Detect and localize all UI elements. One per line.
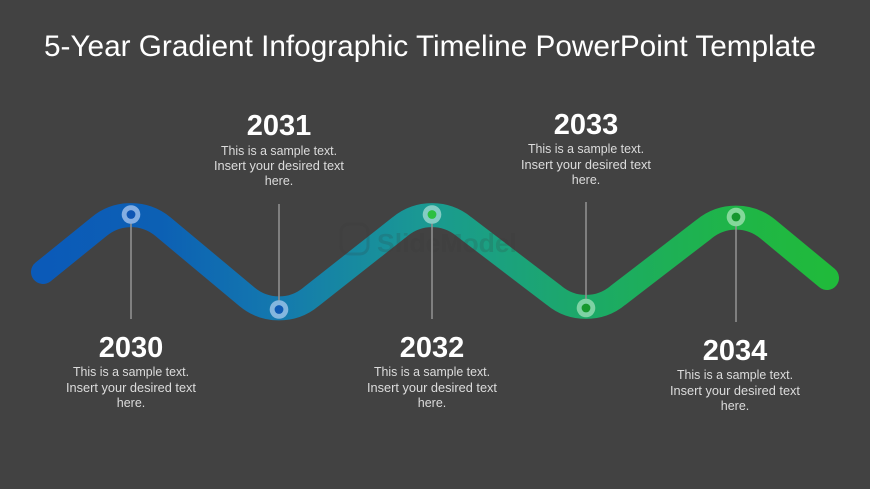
title: 5-Year Gradient Infographic Timeline PowerPoint Template bbox=[44, 30, 816, 63]
label 2034: This is a sample text. bbox=[677, 368, 793, 382]
label 2034: 2034 bbox=[703, 335, 767, 367]
label 2031 bbox=[214, 110, 345, 188]
node 2034 bbox=[727, 208, 745, 226]
node 2030 bbox=[122, 205, 140, 224]
gradient wave ribbon bbox=[43, 215, 827, 308]
label 2030 bbox=[66, 332, 197, 410]
label 2030: This is a sample text. bbox=[73, 365, 189, 379]
label 2033: Insert your desired text bbox=[521, 158, 652, 172]
label 2033: here. bbox=[572, 173, 600, 187]
watermark bbox=[341, 224, 517, 258]
label 2033 bbox=[521, 109, 652, 187]
label 2030: here. bbox=[117, 396, 145, 410]
node 2032 bbox=[423, 205, 441, 224]
label 2031: here. bbox=[265, 174, 293, 188]
label 2031: 2031 bbox=[247, 110, 311, 142]
label 2032: here. bbox=[418, 396, 446, 410]
label 2031: Insert your desired text bbox=[214, 159, 345, 173]
label 2034 bbox=[670, 335, 801, 413]
label 2031: This is a sample text. bbox=[221, 144, 337, 158]
label 2034: Insert your desired text bbox=[670, 384, 801, 398]
label 2033: This is a sample text. bbox=[528, 142, 644, 156]
label 2032 bbox=[367, 332, 498, 410]
label 2030: Insert your desired text bbox=[66, 381, 197, 395]
node 2033 bbox=[577, 299, 595, 317]
label 2032: Insert your desired text bbox=[367, 381, 498, 395]
label 2032: This is a sample text. bbox=[374, 365, 490, 379]
label 2030: 2030 bbox=[99, 332, 163, 364]
watermark: SlideModel bbox=[377, 228, 517, 258]
label 2032: 2032 bbox=[400, 332, 464, 364]
connector lines bbox=[131, 202, 736, 322]
label 2034: here. bbox=[721, 399, 749, 413]
node 2031 bbox=[270, 300, 288, 319]
label 2033: 2033 bbox=[554, 109, 618, 141]
